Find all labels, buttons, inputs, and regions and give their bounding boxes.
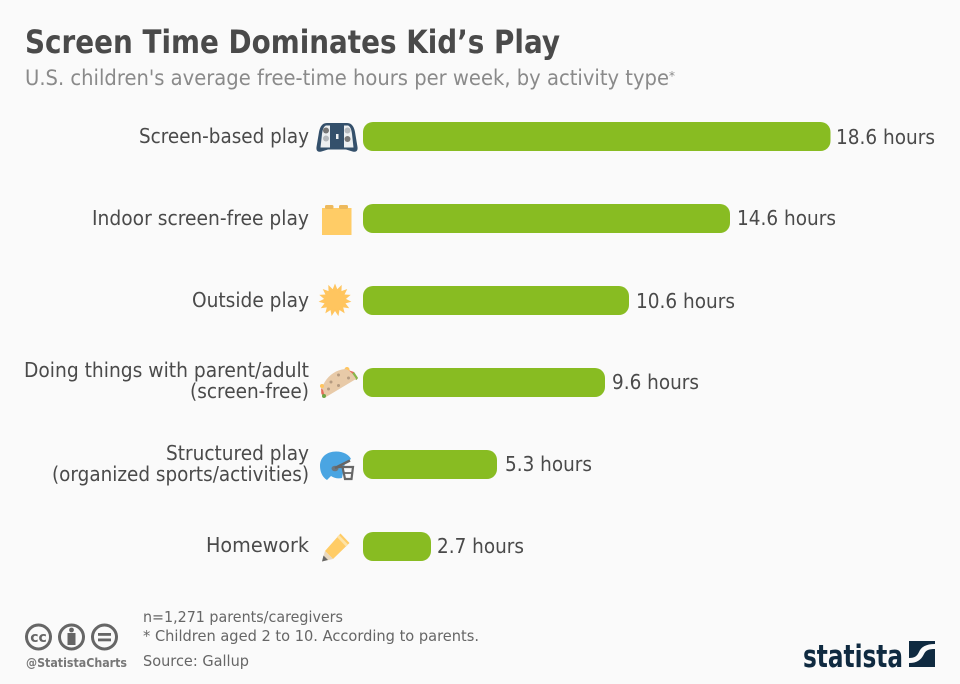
notes — [143, 608, 479, 670]
icon: creative commons — [26, 625, 116, 649]
value: 10.6 hours: 10.6 hours — [636, 289, 735, 313]
bar: Doing things with parent/adult — [363, 368, 605, 397]
icon: taco — [320, 367, 358, 398]
category label: Doing things with parent/adult (screen-free): Doing things with parent/adult — [24, 358, 309, 382]
title: Screen Time Dominates Kid’s Play — [25, 23, 560, 61]
value: 9.6 hours: 9.6 hours — [612, 370, 699, 394]
bar: Indoor screen-free play — [363, 204, 730, 233]
notes: Source: Gallup — [143, 652, 249, 670]
category label: Doing things with parent/adult (screen-free): (screen-free) — [190, 379, 309, 403]
category label: Structured play (organized sports/activities): Structured play — [166, 441, 309, 465]
category label: Homework: Homework — [206, 533, 309, 557]
category label: Screen-based play: Screen-based play — [139, 124, 309, 148]
icon: football helmet — [320, 452, 353, 480]
category label: Indoor screen-free play: Indoor screen-free play — [92, 206, 309, 230]
category label: Doing things with parent/adult (screen-free) — [24, 358, 309, 403]
credit: @StatistaCharts: @StatistaCharts — [26, 656, 127, 670]
icon: sun — [318, 284, 352, 317]
logo: statista: statista — [803, 639, 903, 675]
notes: * Children aged 2 to 10. According to parents. — [143, 627, 479, 645]
value: 18.6 hours: 18.6 hours — [836, 125, 935, 149]
icon: toy brick — [322, 205, 352, 235]
category label: Outside play: Outside play — [192, 288, 309, 312]
value: 2.7 hours: 2.7 hours — [437, 534, 524, 558]
subtitle: U.S. children's average free-time hours per week, by activity type — [25, 66, 669, 90]
bar: Structured play — [363, 450, 497, 479]
value: 5.3 hours: 5.3 hours — [505, 452, 592, 476]
icon: creative commons: cc — [30, 630, 47, 646]
bar: Homework — [363, 532, 431, 561]
bar: Screen-based play — [363, 122, 830, 151]
icon: game console — [316, 123, 358, 152]
category label: Structured play (organized sports/activities) — [52, 441, 309, 486]
category label: Structured play (organized sports/activities): (organized sports/activities) — [52, 462, 309, 486]
subtitle: * — [669, 69, 675, 83]
bar: Outside play — [363, 286, 629, 315]
icon: pencil — [322, 534, 350, 562]
notes: n=1,271 parents/caregivers — [143, 608, 343, 626]
value: 14.6 hours: 14.6 hours — [737, 206, 836, 230]
